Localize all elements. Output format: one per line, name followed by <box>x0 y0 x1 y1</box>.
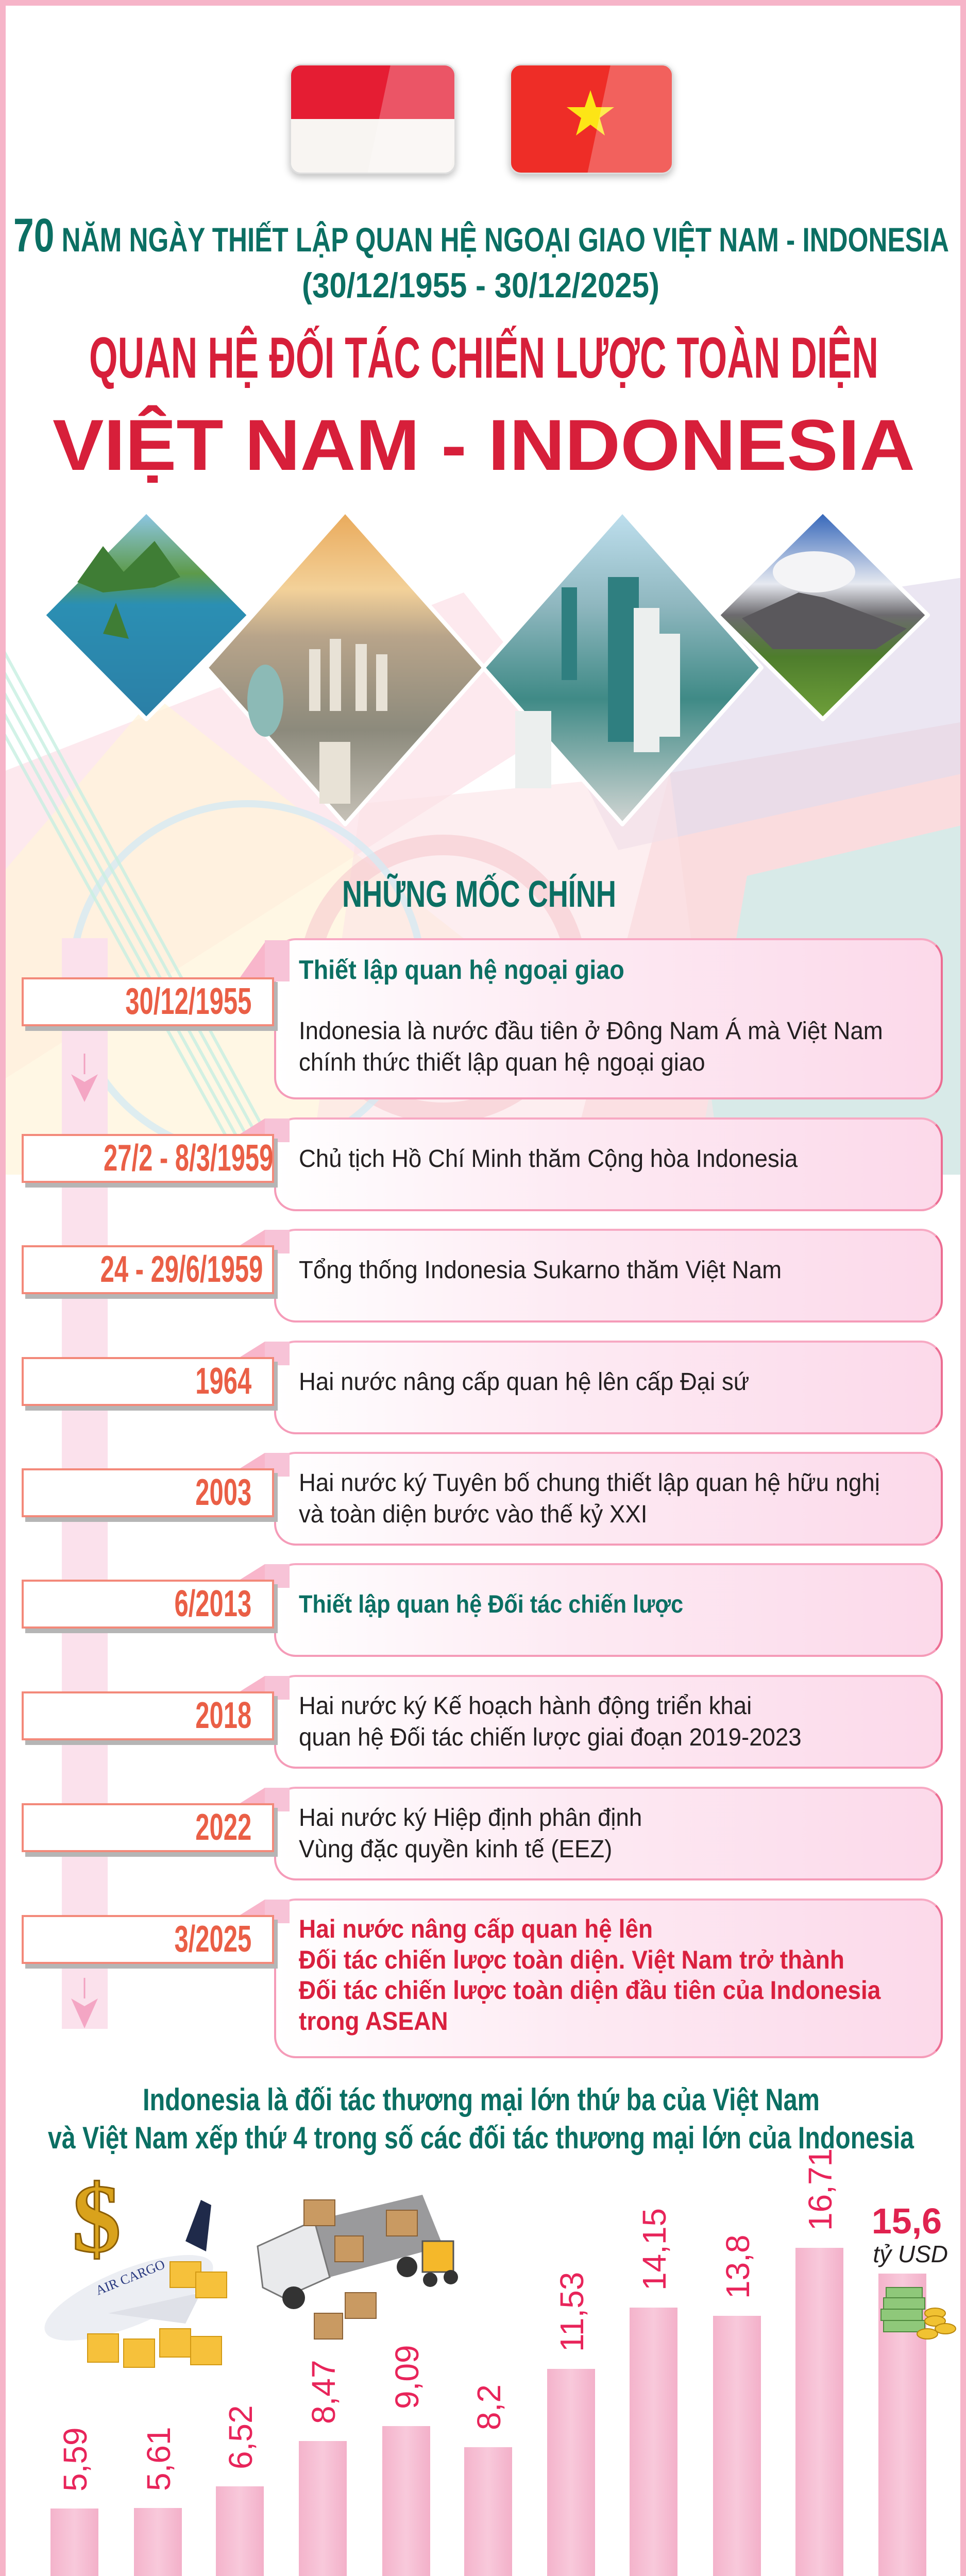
bar 2025 <box>878 2274 926 2576</box>
bar 2023: 13,8 <box>719 2234 756 2299</box>
milestone 1955 <box>22 938 943 1099</box>
bar 2017 <box>216 2405 264 2576</box>
bar 2022 <box>630 2208 677 2576</box>
milestone 1955: chính thức thiết lập quan hệ ngoại giao <box>299 1049 705 1076</box>
bar 2021: 11,53 <box>553 2272 590 2352</box>
milestone 3/2025: Đối tác chiến lược toàn diện đầu tiên của Indonesia <box>299 1976 880 2005</box>
bar 2020: 8,2 <box>470 2384 507 2430</box>
milestone 2018: Hai nước ký Kế hoạch hành động triển khai <box>299 1692 752 1720</box>
milestone 2022 <box>22 1787 943 1880</box>
bar 2019 <box>382 2345 430 2576</box>
header titles <box>13 209 949 484</box>
bar 2018 <box>299 2360 347 2576</box>
milestone 2022: Hai nước ký Hiệp định phân định <box>299 1804 642 1832</box>
bar chart <box>50 2148 926 2576</box>
callout: 2025 value: 15,6 <box>872 2201 942 2241</box>
milestone 2003: 2003 <box>195 1472 251 1513</box>
milestone 2018: 2018 <box>195 1695 251 1736</box>
milestone 1959 HCM <box>22 1117 943 1211</box>
milestone 1964 <box>22 1341 943 1434</box>
bar 2020 <box>464 2384 512 2576</box>
bar 2015: 5,59 <box>57 2427 94 2492</box>
milestone 1959 Sukarno: Tổng thống Indonesia Sukarno thăm Việt Nam <box>299 1257 782 1284</box>
bar 2024 <box>795 2148 843 2576</box>
milestone 3/2025: Hai nước nâng cấp quan hệ lên <box>299 1914 653 1943</box>
milestone 3/2025 <box>22 1899 943 2058</box>
bar 2015 <box>50 2427 98 2576</box>
flag: Indonesia <box>290 64 456 174</box>
bar 2023 <box>713 2234 761 2576</box>
milestone 2003 <box>22 1452 943 1546</box>
milestone 3/2025: trong ASEAN <box>299 2006 448 2035</box>
background decorations <box>6 578 960 1175</box>
milestone 1959 Sukarno: 24 - 29/6/1959 <box>100 1249 263 1290</box>
milestone 2018 <box>22 1675 943 1769</box>
bar 2016 <box>134 2427 182 2576</box>
milestone 3/2025: Đối tác chiến lược toàn diện. Việt Nam trở thành <box>299 1945 844 1974</box>
arrow: bottom <box>71 1978 98 2028</box>
photo: Hanoi city <box>206 511 484 824</box>
main title: VIỆT NAM - INDONESIA <box>53 404 915 484</box>
arrow: top <box>71 1054 98 1102</box>
milestone 2003: và toàn diện bước vào thế kỷ XXI <box>299 1501 647 1528</box>
bar 2021 <box>547 2272 595 2576</box>
illustration: air cargo <box>44 2165 227 2368</box>
bar 2024: 16,71 <box>802 2148 839 2231</box>
photo: Ha Long bay <box>43 511 249 719</box>
milestone 2018: quan hệ Đối tác chiến lược giai đoạn 2019-2023 <box>299 1724 802 1751</box>
photo: volcano <box>718 511 928 719</box>
chart heading <box>48 2082 914 2155</box>
callout: 2025 value <box>866 2202 948 2268</box>
illustration: air cargo: AIR CARGO <box>93 2257 167 2298</box>
bar 2019: 9,09 <box>388 2345 426 2409</box>
section heading: milestones: NHỮNG MỐC CHÍNH <box>342 873 616 915</box>
milestone 1955: 30/12/1955 <box>125 981 251 1022</box>
callout: 2025 value: tỷ USD <box>873 2241 948 2267</box>
milestone 1959 HCM: Chủ tịch Hồ Chí Minh thăm Cộng hòa Indonesia <box>299 1145 798 1173</box>
illustration: truck <box>257 2195 458 2340</box>
photo diamonds <box>46 514 930 826</box>
chart heading: Indonesia là đối tác thương mại lớn thứ ba của Việt Nam <box>143 2082 820 2117</box>
photo: Jakarta city <box>483 511 761 824</box>
flag: Vietnam <box>510 64 673 174</box>
milestone 2003: Hai nước ký Tuyên bố chung thiết lập quan hệ hữu nghị <box>299 1469 880 1497</box>
milestone 1964: Hai nước nâng cấp quan hệ lên cấp Đại sứ <box>299 1368 749 1396</box>
icon: money pile <box>873 2277 958 2347</box>
milestone 6/2013 <box>22 1563 943 1657</box>
milestone 3/2025: 3/2025 <box>174 1919 251 1960</box>
title line 2: (30/12/1955 - 30/12/2025) <box>302 266 659 305</box>
timeline vertical track <box>62 938 108 2029</box>
bar 2017: 6,52 <box>222 2405 259 2469</box>
milestone 1955: Indonesia là nước đầu tiên ở Đông Nam Á mà Việt Nam <box>299 1018 883 1045</box>
bar 2016: 5,61 <box>140 2427 177 2491</box>
bar 2022: 14,15 <box>636 2208 673 2291</box>
milestone 1955: Thiết lập quan hệ ngoại giao <box>299 955 624 985</box>
milestone 1964: 1964 <box>195 1361 251 1402</box>
milestone 2022: Vùng đặc quyền kinh tế (EEZ) <box>299 1836 612 1863</box>
milestone 6/2013: 6/2013 <box>174 1583 251 1624</box>
milestone 6/2013: Thiết lập quan hệ Đối tác chiến lược <box>299 1591 683 1618</box>
illustration: air cargo: $ <box>72 2165 121 2273</box>
bar 2018: 8,47 <box>305 2360 342 2424</box>
milestone 1959 HCM: 27/2 - 8/3/1959 <box>104 1138 273 1179</box>
milestone 1959 Sukarno <box>22 1229 943 1323</box>
milestone 2022: 2022 <box>195 1807 251 1848</box>
